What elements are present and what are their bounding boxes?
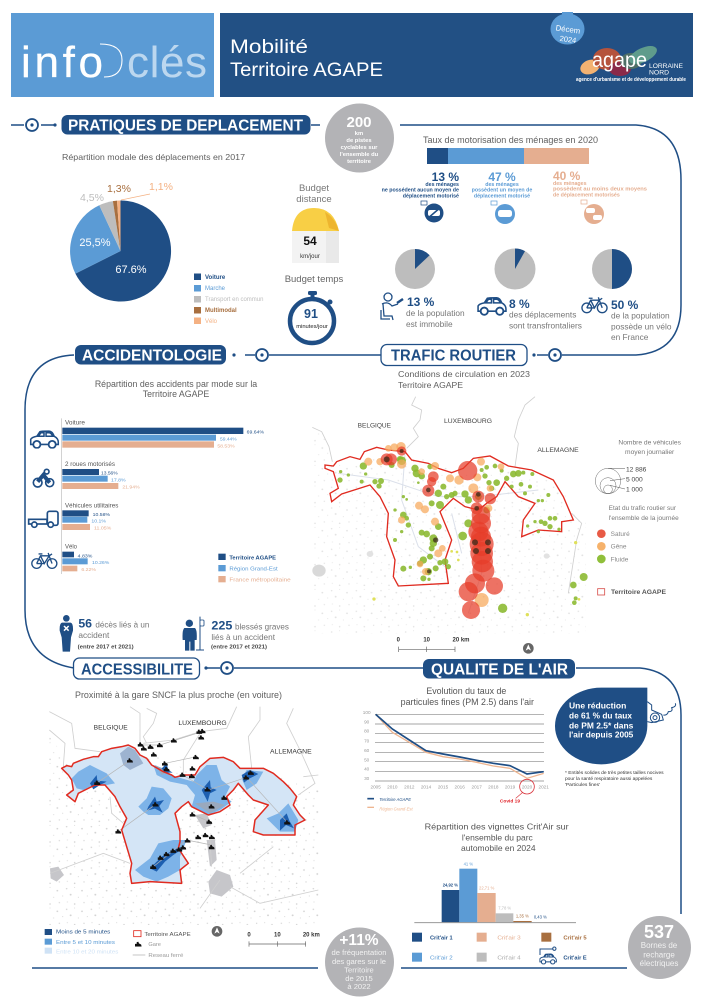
callout: 200 km de pistes cyclables: de pistes	[346, 138, 372, 144]
access legend: Reseau ferré	[148, 953, 183, 959]
stat: 225 blessés graves: liés à un accident	[211, 632, 276, 642]
bar chart title: automobile en 2024	[461, 843, 536, 853]
axis labels: 2017	[471, 785, 482, 790]
bars: véhicules utilitaires	[62, 502, 118, 532]
callout: 200 km de pistes cyclables: 200	[346, 114, 372, 131]
stat: 50 % vélo: possède un vélo	[611, 322, 672, 332]
callout: 537 bornes de recharge: électriques	[640, 959, 678, 968]
stat: 50 % vélo: en France	[611, 332, 649, 342]
icon: one car	[491, 201, 515, 224]
legend: état du trafic: l'ensemble de la journée	[609, 515, 679, 522]
stat: 47 % ménages: déplacement motorisé	[474, 194, 530, 200]
pie chart: répartition modale: 25,5%	[79, 237, 111, 249]
stat: 47 % ménages: possèdent un moyen de	[472, 188, 532, 194]
axis labels: 2016	[454, 785, 465, 790]
stat: 40 % ménages	[553, 169, 647, 198]
pie chart: répartition modale: 1,3%	[107, 183, 131, 195]
bars: véhicules utilitaires: 10.58%	[93, 512, 111, 518]
roads	[338, 453, 538, 613]
stat: 8 % transfrontaliers: sont transfrontaliers	[509, 320, 582, 330]
heading: pratiques de deplacement: PRATIQUES DE DEPLACEMENT	[68, 118, 303, 134]
heading: trafic routier: TRAFIC ROUTIER	[391, 348, 516, 364]
stat: 50 % vélo: 50 %	[611, 298, 639, 312]
territory fill	[62, 745, 305, 883]
covid marker: Covid 19	[500, 799, 520, 805]
stat: 56 décès: accident	[78, 630, 110, 640]
series: région grand-est	[376, 714, 544, 778]
borders	[312, 397, 582, 593]
callout: réduction de 61 %: l'air depuis 2005	[569, 730, 634, 740]
scale bar	[247, 932, 320, 947]
axis labels: 2015	[438, 785, 449, 790]
axis labels: 40	[364, 767, 370, 772]
stat: 13 % immobile: 13 %	[407, 295, 435, 309]
bars: vélo: Vélo	[65, 544, 77, 551]
bar legend: Crit'air 1	[430, 935, 453, 941]
circles: gêne	[364, 442, 504, 607]
icon: bike	[32, 553, 57, 568]
zones: 5 to 10 minutes	[72, 747, 298, 882]
header title: Mobilité	[230, 36, 308, 58]
callout: réduction de 61 %: de 61 % du taux	[569, 710, 632, 720]
icon: exhaust car	[647, 702, 676, 723]
bar legend: Crit'air E	[563, 955, 587, 961]
bars: voiture: Voiture	[65, 420, 85, 427]
callout: réduction de 61 %: de PM 2.5* dans	[569, 720, 634, 730]
stat: 40 % ménages: 40 %	[553, 169, 581, 183]
bars: vélo: 4.83%	[78, 553, 93, 559]
pie legend	[194, 274, 263, 325]
callout: +11 % fréquentation: de 2015	[345, 974, 373, 983]
callout: +11 % fréquentation: des gares sur le	[332, 957, 386, 966]
icon: stopwatch: minutes/jour	[296, 324, 328, 330]
access legend: Gare	[148, 942, 161, 948]
circles: small yellow	[372, 541, 580, 616]
pie legend: Transport en commun	[205, 297, 263, 303]
scale bar: 0	[247, 932, 251, 938]
axis labels: 60	[364, 748, 370, 753]
bar values: 22,71 %	[479, 885, 495, 890]
legend: volume: 5 000	[626, 476, 643, 483]
footnote: pour la santé respiratoire aussi appelées	[565, 776, 652, 781]
territory outline	[325, 447, 573, 586]
access legend: Moins de 5 minutes	[56, 930, 111, 936]
bar values: 24,92 %	[443, 883, 458, 888]
callout: 537 bornes de recharge: Bornes de	[641, 941, 678, 950]
bar values: 7,78 %	[498, 906, 511, 911]
stat: 50 % vélo: de la population	[611, 310, 670, 320]
icon: seated person	[381, 293, 403, 320]
motorisation title: Taux de motorisation des ménages en 2020	[423, 135, 598, 145]
footnote	[565, 770, 664, 787]
stat: 56 décès: 56	[78, 617, 92, 631]
accident chart title: Répartition des accidents par mode sur la	[95, 379, 257, 389]
bar chart: vignettes crit'air	[412, 822, 587, 964]
bars: véhicules utilitaires: 10.1%	[91, 518, 107, 524]
accident chart title	[95, 379, 257, 399]
scale bar	[397, 638, 469, 652]
connector nodes	[26, 119, 561, 674]
accident chart title: Territoire AGAPE	[143, 389, 209, 399]
callout: +11 % fréquentation: +11%	[339, 932, 379, 949]
stat: 8 % transfrontaliers: 8 %	[509, 297, 530, 311]
line chart title: Evolution du taux de	[426, 686, 506, 696]
gray urban overlay	[155, 765, 225, 813]
icon: truck	[29, 511, 58, 527]
callout: 200 km de pistes cyclables: territoire	[347, 159, 372, 165]
callout: 200 km de pistes cyclables: l'ensemble du	[340, 152, 379, 158]
wordmark: clés: clés	[127, 38, 207, 87]
legend: volume: 1 000	[626, 487, 643, 494]
legend: état du trafic: Saturé	[611, 531, 630, 538]
line chart: PM 2.5	[363, 686, 676, 812]
territory outline	[62, 745, 305, 883]
budget temps: Budget temps	[285, 274, 344, 285]
circles: saturé	[381, 446, 503, 619]
north arrow	[523, 643, 534, 654]
icon: person with cross	[60, 615, 73, 652]
stat: 56 décès: décès liés à un	[95, 620, 150, 630]
icon: stopwatch	[290, 291, 334, 343]
callout: 200 km de pistes cyclables: km	[355, 131, 363, 137]
stat: 40 % ménages: des ménages	[553, 181, 587, 187]
icon: no car	[421, 201, 444, 222]
icon: stopwatch: 91	[304, 307, 318, 321]
pie chart: répartition modale: 4,5%	[80, 192, 104, 204]
map: accessibilité	[49, 707, 318, 925]
logo agape: agape	[592, 49, 647, 72]
callout: +11 % fréquentation: Territoire	[344, 966, 374, 974]
stat: 13 % ménages: 13 %	[432, 170, 459, 184]
bar chart: accidents by mode	[29, 418, 265, 574]
bar legend: Crit'air 5	[563, 935, 587, 941]
bars: vélo	[62, 544, 110, 573]
axis labels: 30	[364, 776, 370, 781]
bar legend: Crit'air 3	[497, 935, 521, 941]
stat: 47 % ménages: 47 %	[488, 170, 516, 184]
axis labels: 100	[363, 710, 371, 715]
traffic title: Territoire AGAPE	[398, 380, 463, 390]
heading: accessibilite: ACCESSIBILITE	[81, 662, 193, 678]
bars	[414, 869, 576, 923]
callout: 537 bornes de recharge	[628, 916, 691, 979]
axis labels: 2005	[370, 785, 381, 790]
legend: volume: moyen journalier	[625, 449, 675, 456]
stat: 47 % ménages: des ménages	[485, 182, 519, 188]
country labels: LUXEMBOURG	[178, 720, 227, 727]
date badge	[550, 12, 584, 45]
pie legend: Multimodal	[205, 308, 237, 314]
stat: 13 % ménages: des ménages	[425, 182, 459, 188]
axis labels: 2014	[421, 785, 432, 790]
bar values: 0,43 %	[534, 914, 547, 919]
rail network	[97, 732, 287, 867]
callout: réduction de 61 %	[555, 688, 647, 764]
callout: réduction de 61 %: Une réduction	[569, 701, 626, 711]
callout: +11 % fréquentation: à 2022	[347, 982, 371, 991]
bar chart title: l'ensemble du parc	[462, 833, 534, 843]
line legend: Région Grand-Est	[379, 806, 413, 812]
callout: 537 bornes de recharge: 537	[644, 922, 674, 942]
stat: 13 % immobile: est immobile	[406, 319, 453, 329]
covid marker	[500, 779, 534, 805]
pie legend: Vélo	[205, 319, 218, 325]
north arrow	[212, 926, 222, 937]
circles: dark overlaps	[384, 449, 491, 573]
budget temps	[285, 274, 344, 343]
country labels: BELGIQUE	[358, 422, 392, 429]
callout: 537 bornes de recharge: recharge	[643, 950, 675, 960]
line chart title	[401, 686, 534, 707]
heading: qualite de l'air: QUALITE DE L'AIR	[431, 662, 568, 678]
traffic legend	[595, 439, 682, 596]
heading: accidentologie: ACCIDENTOLOGIE	[82, 348, 222, 364]
line chart title: particules fines (PM 2.5) dans l'air	[401, 697, 534, 707]
budget distance: 54	[303, 234, 317, 248]
icon: bike	[582, 297, 607, 313]
stat: 225 blessés graves: (entre 2017 et 2021)	[211, 644, 267, 650]
bars: 2 roues motorisés	[62, 461, 140, 491]
stat: 8 % transfrontaliers	[509, 297, 582, 330]
legend: territoire: Territoire AGAPE	[611, 589, 667, 596]
stat: 40 % ménages: possèdent au moins deux moyens	[553, 186, 647, 192]
bars: 2 roues motorisés: 21.94%	[122, 485, 140, 491]
budget distance	[292, 183, 339, 263]
axis labels: 2019	[505, 785, 516, 790]
borders and rail	[49, 707, 318, 908]
footnote: 'Particules fines'	[565, 782, 600, 787]
stat: 13 % immobile	[406, 295, 465, 329]
scale bar: 0	[397, 638, 401, 644]
series: territoire agape	[376, 714, 544, 774]
country labels: ALLEMAGNE	[270, 748, 312, 755]
accident legend: France métropolitaine	[229, 578, 291, 584]
stat: 225 blessés graves	[183, 617, 289, 651]
scale bar: 10	[274, 932, 281, 938]
accident legend	[218, 554, 291, 584]
axis labels: 80	[364, 729, 370, 734]
traffic title	[398, 369, 530, 390]
date badge: Décem	[555, 23, 581, 36]
bars: vélo: 6.22%	[81, 567, 97, 573]
access legend: Territoire AGAPE	[144, 932, 191, 938]
wordmark arc	[100, 44, 122, 77]
legend: état du trafic	[597, 505, 679, 563]
stat: 40 % ménages: de déplacement motorisés	[553, 192, 620, 198]
legend: volume	[595, 439, 682, 494]
bars: voiture: 59.44%	[220, 436, 237, 442]
legend: état du trafic: Etat du trafic routier sur	[609, 505, 677, 512]
stat: 225 blessés graves: 225	[211, 618, 232, 632]
header subtitle: Territoire AGAPE	[230, 59, 383, 81]
icon: motorbike	[33, 469, 54, 487]
bars: 2 roues motorisés: 17.8%	[111, 478, 126, 484]
wordmark: info: info	[21, 38, 103, 87]
axis labels: 70	[364, 738, 370, 743]
axis labels: 2012	[404, 785, 415, 790]
stat: 13 % ménages: déplacement motorisé	[403, 194, 459, 200]
stat: 13 % ménages: ne possédent aucun moyen de	[382, 188, 459, 194]
country labels	[94, 720, 312, 755]
axis labels: 90	[364, 719, 370, 724]
traffic title: Conditions de circulation en 2023	[398, 369, 530, 379]
bars: véhicules utilitaires: Véhicules utilitaires	[65, 502, 118, 509]
scale bar: 10	[423, 638, 431, 644]
icon: car	[478, 298, 506, 315]
callout: 200 km de pistes cyclables	[325, 104, 394, 172]
icon: injured person with drip	[183, 617, 204, 651]
bars: 2 roues motorisés: 13.56%	[101, 471, 118, 477]
logo agape: agence d'urbanisme et de développement durable	[576, 77, 686, 83]
icon: electric car	[540, 947, 556, 964]
bars: voiture	[62, 420, 265, 449]
stat: 56 décès: (entre 2017 et 2021)	[78, 644, 134, 650]
scale bar: 20 km	[303, 932, 320, 938]
logo agape: NORD	[649, 70, 669, 76]
bar chart title: Répartition des vignettes Crit'Air sur	[425, 822, 569, 832]
country labels: BELGIQUE	[94, 724, 128, 731]
bar values: 1,35 %	[516, 913, 529, 918]
stat: 13 % immobile: de la population	[406, 308, 465, 318]
accident legend: Territoire AGAPE	[229, 555, 276, 561]
circles: fluide	[337, 456, 588, 613]
axis labels: 2021	[538, 785, 549, 790]
stat: 47 % ménages	[472, 170, 532, 200]
pie: population immobile	[395, 249, 435, 289]
bars: vélo: 10.26%	[92, 560, 110, 566]
legend: volume: 12 886	[626, 466, 647, 473]
access legend	[45, 926, 320, 959]
bar legend: Crit'air 2	[430, 955, 453, 961]
country labels: ALLEMAGNE	[537, 447, 579, 454]
axis labels: 2020	[522, 785, 533, 790]
budget distance: Budget	[299, 183, 329, 194]
accident legend: Région Grand-Est	[229, 567, 278, 573]
zones: under 5 minutes	[90, 763, 294, 872]
budget distance: distance	[296, 194, 332, 205]
bars: voiture: 69.64%	[247, 430, 265, 436]
stat: 13 % ménages	[382, 170, 459, 200]
bar chart title	[425, 822, 569, 853]
header: title panel	[220, 12, 693, 97]
bar values: 41 %	[464, 861, 473, 866]
line legend: Territoire AGAPE	[379, 797, 412, 803]
axis labels: 50	[364, 757, 370, 762]
bars: 2 roues motorisés: 2 roues motorisés	[65, 461, 115, 468]
stat: 56 décès	[60, 615, 150, 652]
pie legend: Marche	[205, 286, 226, 292]
access legend: Entre 5 et 10 minutes	[56, 940, 115, 946]
axis labels: 2010	[387, 785, 398, 790]
access legend: Entre 10 et 20 minutes	[56, 949, 119, 955]
stat: 8 % transfrontaliers: des déplacements	[509, 310, 576, 320]
legend: état du trafic: Fluide	[611, 556, 629, 563]
logo agape	[576, 42, 686, 83]
callout: +11 % fréquentation	[325, 928, 394, 996]
urban areas	[50, 813, 233, 897]
bars: véhicules utilitaires: 11.05%	[94, 526, 112, 532]
country labels: LUXEMBOURG	[444, 418, 492, 425]
budget distance: km/jour	[300, 254, 320, 260]
stat: 225 blessés graves: blessés graves	[235, 622, 289, 632]
stat: 50 % vélo	[611, 298, 672, 342]
country labels	[358, 418, 579, 454]
pie chart: répartition modale: 67.6%	[115, 264, 147, 276]
scale bar: 20 km	[453, 638, 469, 644]
logo agape: LORRAINE	[649, 63, 684, 70]
axis labels: 2018	[488, 785, 499, 790]
legend: état du trafic: Gêne	[611, 544, 627, 551]
pie chart: répartition modale	[70, 181, 173, 301]
pie chart title: Répartition modale des déplacements en 2017	[62, 152, 245, 162]
icon: two cars	[581, 200, 604, 224]
footnote: * Entités solides de très petites tailles nocives	[565, 770, 664, 775]
pie chart: répartition modale: 1,1%	[149, 181, 173, 193]
pie: déplacements transfrontaliers	[494, 248, 536, 290]
stacked bar: motorisation	[427, 148, 589, 164]
bar legend: Crit'air 4	[497, 955, 521, 961]
icon: milestone	[292, 208, 339, 263]
grid	[375, 714, 544, 781]
bars: voiture: 58.53%	[217, 443, 235, 449]
pie: vélo	[592, 249, 632, 289]
access map title: Proximité à la gare SNCF la plus proche (en voiture)	[75, 690, 282, 700]
icon: car	[31, 431, 58, 448]
bar values	[443, 861, 547, 919]
pie legend: Voiture	[205, 275, 226, 281]
header: info clés panel	[11, 13, 214, 97]
legend: volume: Nombre de véhicules	[618, 439, 682, 446]
stations	[94, 729, 290, 869]
bar legend	[412, 933, 587, 962]
callout: +11 % fréquentation: de fréquentation	[332, 948, 386, 957]
line legend	[367, 797, 413, 812]
axis labels	[363, 710, 549, 790]
callout: 200 km de pistes cyclables: cyclables sur	[341, 145, 378, 151]
date badge: 2024	[559, 34, 577, 45]
map: trafic routier	[312, 397, 588, 654]
